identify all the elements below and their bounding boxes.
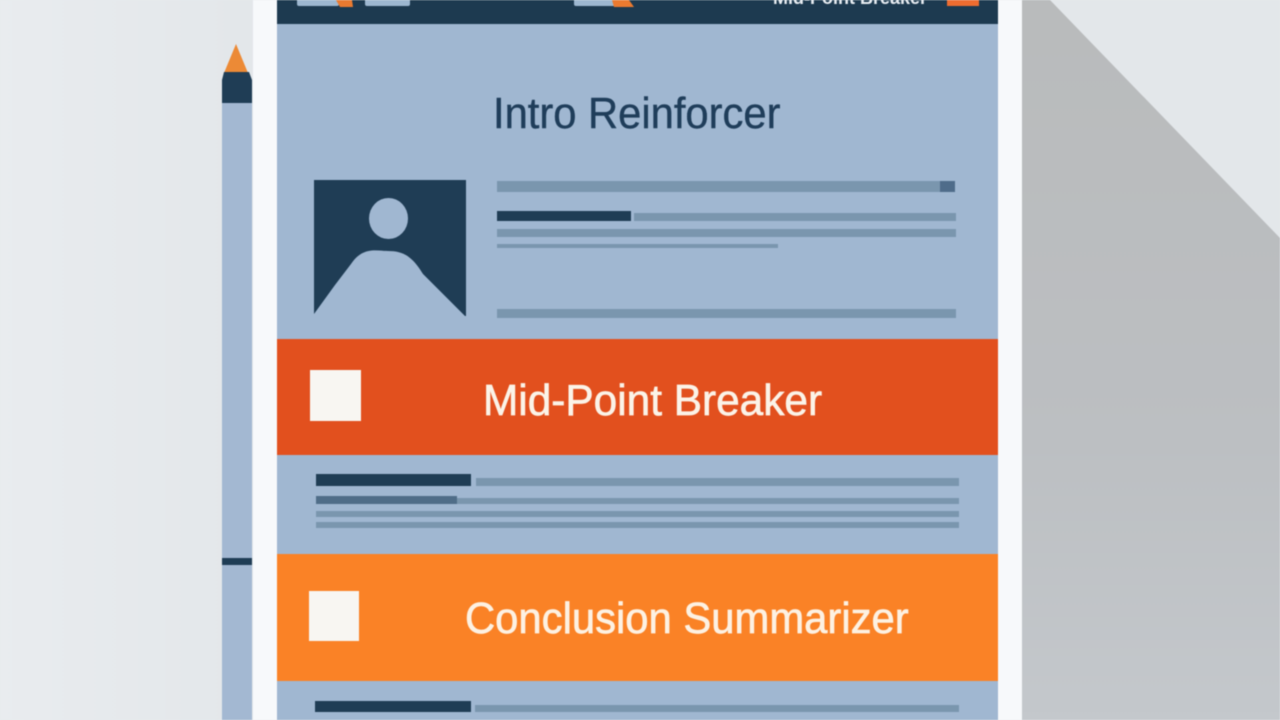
dark lead <box>316 474 471 486</box>
page: document card <box>253 0 1022 720</box>
pencil band <box>222 558 252 565</box>
banner icon square <box>309 591 359 641</box>
header thumbnail 2 <box>365 0 410 6</box>
line 2 <box>634 213 956 221</box>
line 3 <box>316 511 959 517</box>
placeholder head <box>369 198 408 239</box>
line 3 <box>497 229 956 237</box>
medium lead <box>316 496 457 504</box>
header orange marker 1 <box>336 0 354 8</box>
banner title: Conclusion Summarizer <box>465 594 909 643</box>
line 1 <box>497 181 940 192</box>
header bar <box>277 0 998 24</box>
text lines: mid-point <box>315 473 960 528</box>
banner icon square <box>310 370 361 421</box>
line 2 <box>457 498 959 504</box>
header thumbnail 1 <box>297 0 339 6</box>
pencil dark collar <box>221 71 253 104</box>
heading: Intro Reinforcer: Intro Reinforcer <box>493 89 780 138</box>
line 4 <box>497 244 778 248</box>
icon: pencil <box>221 44 253 720</box>
text lines: intro <box>496 180 956 318</box>
placeholder shoulders <box>314 250 466 317</box>
header orange marker 2 <box>612 0 634 8</box>
dark lead <box>315 701 471 712</box>
image placeholder <box>313 179 467 316</box>
page body <box>277 0 998 720</box>
pencil body <box>222 103 252 720</box>
line 1 <box>476 478 959 486</box>
header orange square <box>947 0 979 6</box>
highlighted line start <box>497 211 631 221</box>
line 4 <box>316 522 959 528</box>
line 1 end marker <box>940 181 955 192</box>
header thumbnail 3 <box>574 0 616 6</box>
banner: Mid-Point Breaker <box>277 339 998 455</box>
banner: Conclusion Summarizer <box>277 554 998 681</box>
pencil orange tip <box>224 44 248 73</box>
line 1 <box>475 705 959 712</box>
banner title: Mid-Point Breaker <box>483 376 822 425</box>
text lines: conclusion <box>314 700 960 713</box>
line 5 <box>497 309 956 318</box>
